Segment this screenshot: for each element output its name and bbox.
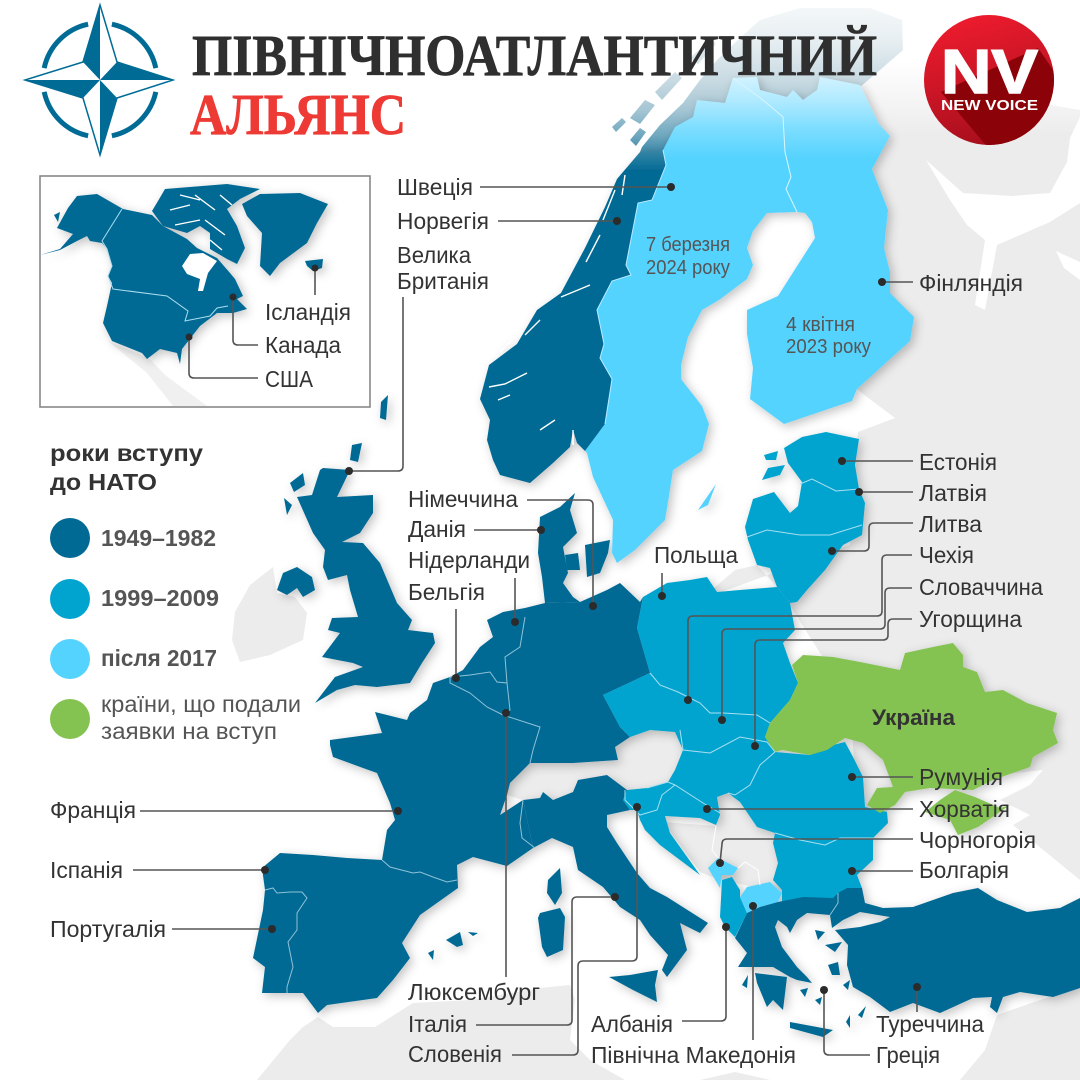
label: Greece: [820, 986, 940, 1068]
map of Europe: [232, 8, 1080, 1080]
label: Bulgaria: [848, 857, 1009, 883]
map countries with shadow: [253, 77, 1080, 1037]
label: Albania: [591, 923, 730, 1037]
legend item: applicants: заявки на вступ: [101, 718, 277, 744]
inset map: North America: [40, 176, 370, 407]
label: Estonia: Естонія: [919, 449, 997, 475]
Norway: [480, 150, 666, 483]
logo: NATO compass: [25, 5, 173, 155]
label: Lithuania: Литва: [919, 511, 982, 537]
label: Greece: Греція: [876, 1042, 940, 1068]
legend heading: роки вступу: [50, 440, 203, 466]
label: Poland: [654, 542, 738, 600]
inset label: USA: [186, 334, 314, 392]
inset label: USA: США: [265, 366, 314, 392]
label: Spain: [50, 857, 269, 883]
label: Bulgaria: Болгарія: [919, 857, 1009, 883]
legend item: 1949–1982: 1949–1982: [101, 525, 216, 551]
label: Belgium: Бельгія: [408, 579, 485, 605]
label: Germany: Німеччина: [408, 486, 518, 512]
label: Turkey: [876, 983, 984, 1037]
Central and Eastern Europe members: [603, 577, 888, 902]
seas over background land: [830, 117, 1080, 900]
legend item: after 2017: після 2017: [101, 645, 217, 671]
label: Netherlands: [408, 547, 530, 626]
inset label: Canada: Канада: [265, 332, 341, 358]
label: France: [50, 797, 402, 823]
label: Norway: Норвегія: [397, 208, 489, 234]
label: Czechia: Чехія: [919, 542, 974, 568]
Islands of the western Mediterranean: [428, 868, 658, 1002]
label: Latvia: Латвія: [919, 480, 987, 506]
Finland: [733, 77, 914, 424]
label: Great Britain: Велика: [397, 242, 471, 268]
northern Norway, fading out: [612, 8, 903, 155]
label: Czechia: [684, 542, 974, 704]
legend item: 1949–1982: [50, 518, 216, 558]
date note: Finland: 4 квітня: [786, 314, 855, 336]
Ukraine: [765, 643, 1058, 835]
inset label: Canada: [230, 294, 341, 358]
legend item: applicants: [50, 691, 301, 744]
label: Poland: Польща: [654, 542, 738, 568]
Greece: [735, 893, 866, 1037]
label: Lithuania: [828, 511, 982, 555]
label: France: Франція: [50, 797, 136, 823]
label: Hungary: Угорщина: [919, 606, 1022, 632]
Montenegro: [708, 858, 738, 888]
title: [190, 23, 877, 147]
Denmark: [538, 493, 610, 603]
label: Great Britain: [345, 242, 489, 475]
label: Slovakia: Словаччина: [919, 574, 1043, 600]
label: Slovakia: [718, 574, 1043, 724]
label: Portugal: Португалія: [50, 916, 166, 942]
legend heading: [50, 440, 203, 495]
label: Germany: [408, 486, 597, 610]
legend heading: до НАТО: [50, 469, 157, 495]
label: Norway: [397, 208, 621, 234]
label: Italy: [408, 893, 619, 1037]
United Kingdom: [277, 395, 435, 703]
Western Europe: France, Spain, Portugal, Benelux, Germany: [253, 583, 650, 1013]
label: Romania: [848, 764, 1003, 790]
internal borders: [265, 78, 873, 993]
label: Spain: Іспанія: [50, 857, 123, 883]
Albania: [720, 877, 747, 937]
label: Montenegro: Чорногорія: [919, 827, 1036, 853]
Sweden: [585, 78, 797, 563]
logo: NV New Voice: NV: [941, 38, 1038, 107]
label: Albania: Албанія: [591, 1011, 673, 1037]
label: North Macedonia: [591, 902, 796, 1068]
label: Latvia: [855, 480, 987, 506]
logo: NV New Voice: NEW VOICE: [941, 98, 1038, 114]
date note: Finland: [786, 314, 871, 358]
label: Denmark: [408, 516, 545, 542]
label: Sweden: [397, 174, 675, 200]
label: North Macedonia: Північна Македонія: [591, 1042, 796, 1068]
label: Croatia: Хорватія: [919, 796, 1010, 822]
label: Ukraine: Україна: [872, 705, 956, 730]
label: Sweden: Швеція: [397, 174, 473, 200]
label: Portugal: [50, 916, 276, 942]
date note: Sweden: 7 березня: [646, 234, 730, 256]
date note: Sweden: [646, 234, 730, 279]
label: Hungary: [751, 606, 1022, 750]
label: Italy: Італія: [408, 1011, 467, 1037]
label: Finland: Фінляндія: [919, 270, 1023, 296]
label: Luxembourg: Люксембург: [408, 979, 540, 1005]
label: Denmark: Данія: [408, 516, 466, 542]
label: Slovenia: Словенія: [408, 1041, 502, 1067]
Baltic states: [745, 432, 865, 603]
legend item: 1999–2009: 1999–2009: [101, 585, 219, 611]
label: Netherlands: Нідерланди: [408, 547, 530, 573]
inset label: Iceland: Ісландія: [265, 299, 351, 325]
label: Slovenia: [408, 803, 641, 1067]
Gotland: [698, 484, 716, 510]
legend item: after 2017: [50, 639, 217, 679]
legend item: applicants: країни, що подали: [101, 691, 301, 717]
Turkey: [830, 888, 1080, 1013]
label: Great Britain: Британія: [397, 268, 489, 294]
label: Croatia: [703, 796, 1010, 822]
label: Montenegro: [716, 827, 1036, 867]
title: ПІВНІЧНОАТЛАНТИЧНИЙ: [192, 23, 877, 88]
inset label: Iceland: [265, 264, 351, 325]
date note: Sweden: 2024 року: [646, 257, 730, 279]
logo: NV New Voice: [924, 15, 1060, 150]
label: Turkey: Туреччина: [876, 1011, 984, 1037]
label: Estonia: [838, 449, 997, 475]
date note: Finland: 2023 року: [786, 336, 871, 358]
Italy: [523, 775, 708, 977]
title: АЛЬЯНС: [190, 82, 406, 147]
legend item: 1999–2009: [50, 579, 219, 619]
label: Luxembourg: [408, 709, 540, 1005]
label: Romania: Румунія: [919, 764, 1003, 790]
label: Belgium: [408, 579, 485, 682]
background land: non-member countries: [232, 60, 1080, 1080]
legend: [50, 440, 301, 744]
North Macedonia: [740, 882, 782, 913]
